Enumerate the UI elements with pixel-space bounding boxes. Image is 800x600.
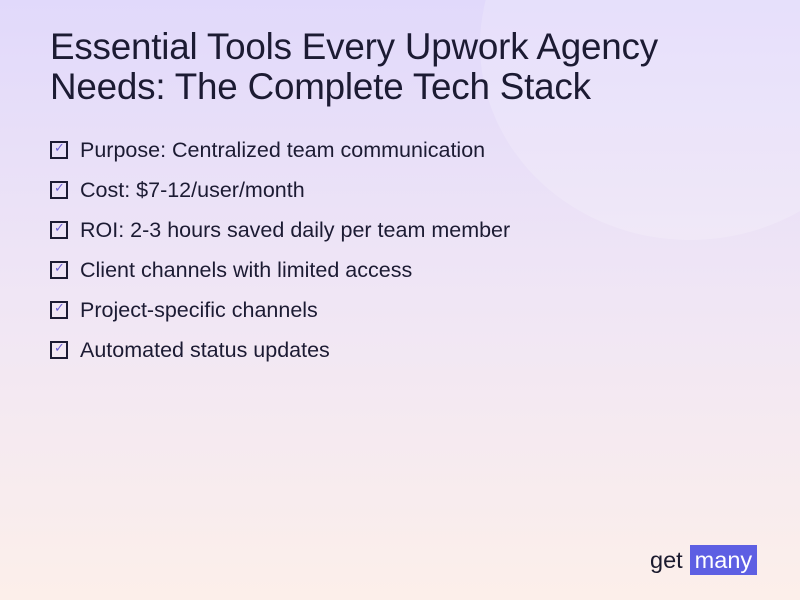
item: client channels: Client channels with limited access (80, 258, 412, 282)
checklist (50, 138, 510, 362)
item: cost: Cost: $7-12/user/month (80, 178, 305, 202)
item: client channels: ✓ (54, 260, 65, 275)
item: purpose: ✓ (54, 140, 65, 155)
logo (650, 545, 757, 575)
item: roi: ROI: 2-3 hours saved daily per team member (80, 218, 510, 242)
item: roi: ✓ (54, 220, 65, 235)
item: purpose: Purpose: Centralized team communication (80, 138, 485, 162)
item: status updates: Automated status updates (80, 338, 330, 362)
title: Essential Tools Every Upwork Agency (50, 26, 658, 67)
item: project channels: Project-specific channels (80, 298, 318, 322)
logo: get (650, 546, 683, 572)
item: cost: ✓ (54, 180, 65, 195)
item: project channels: ✓ (54, 300, 65, 315)
logo: many (695, 547, 752, 573)
title (50, 26, 658, 107)
item: status updates: ✓ (54, 340, 65, 355)
title: Needs: The Complete Tech Stack (50, 66, 591, 107)
